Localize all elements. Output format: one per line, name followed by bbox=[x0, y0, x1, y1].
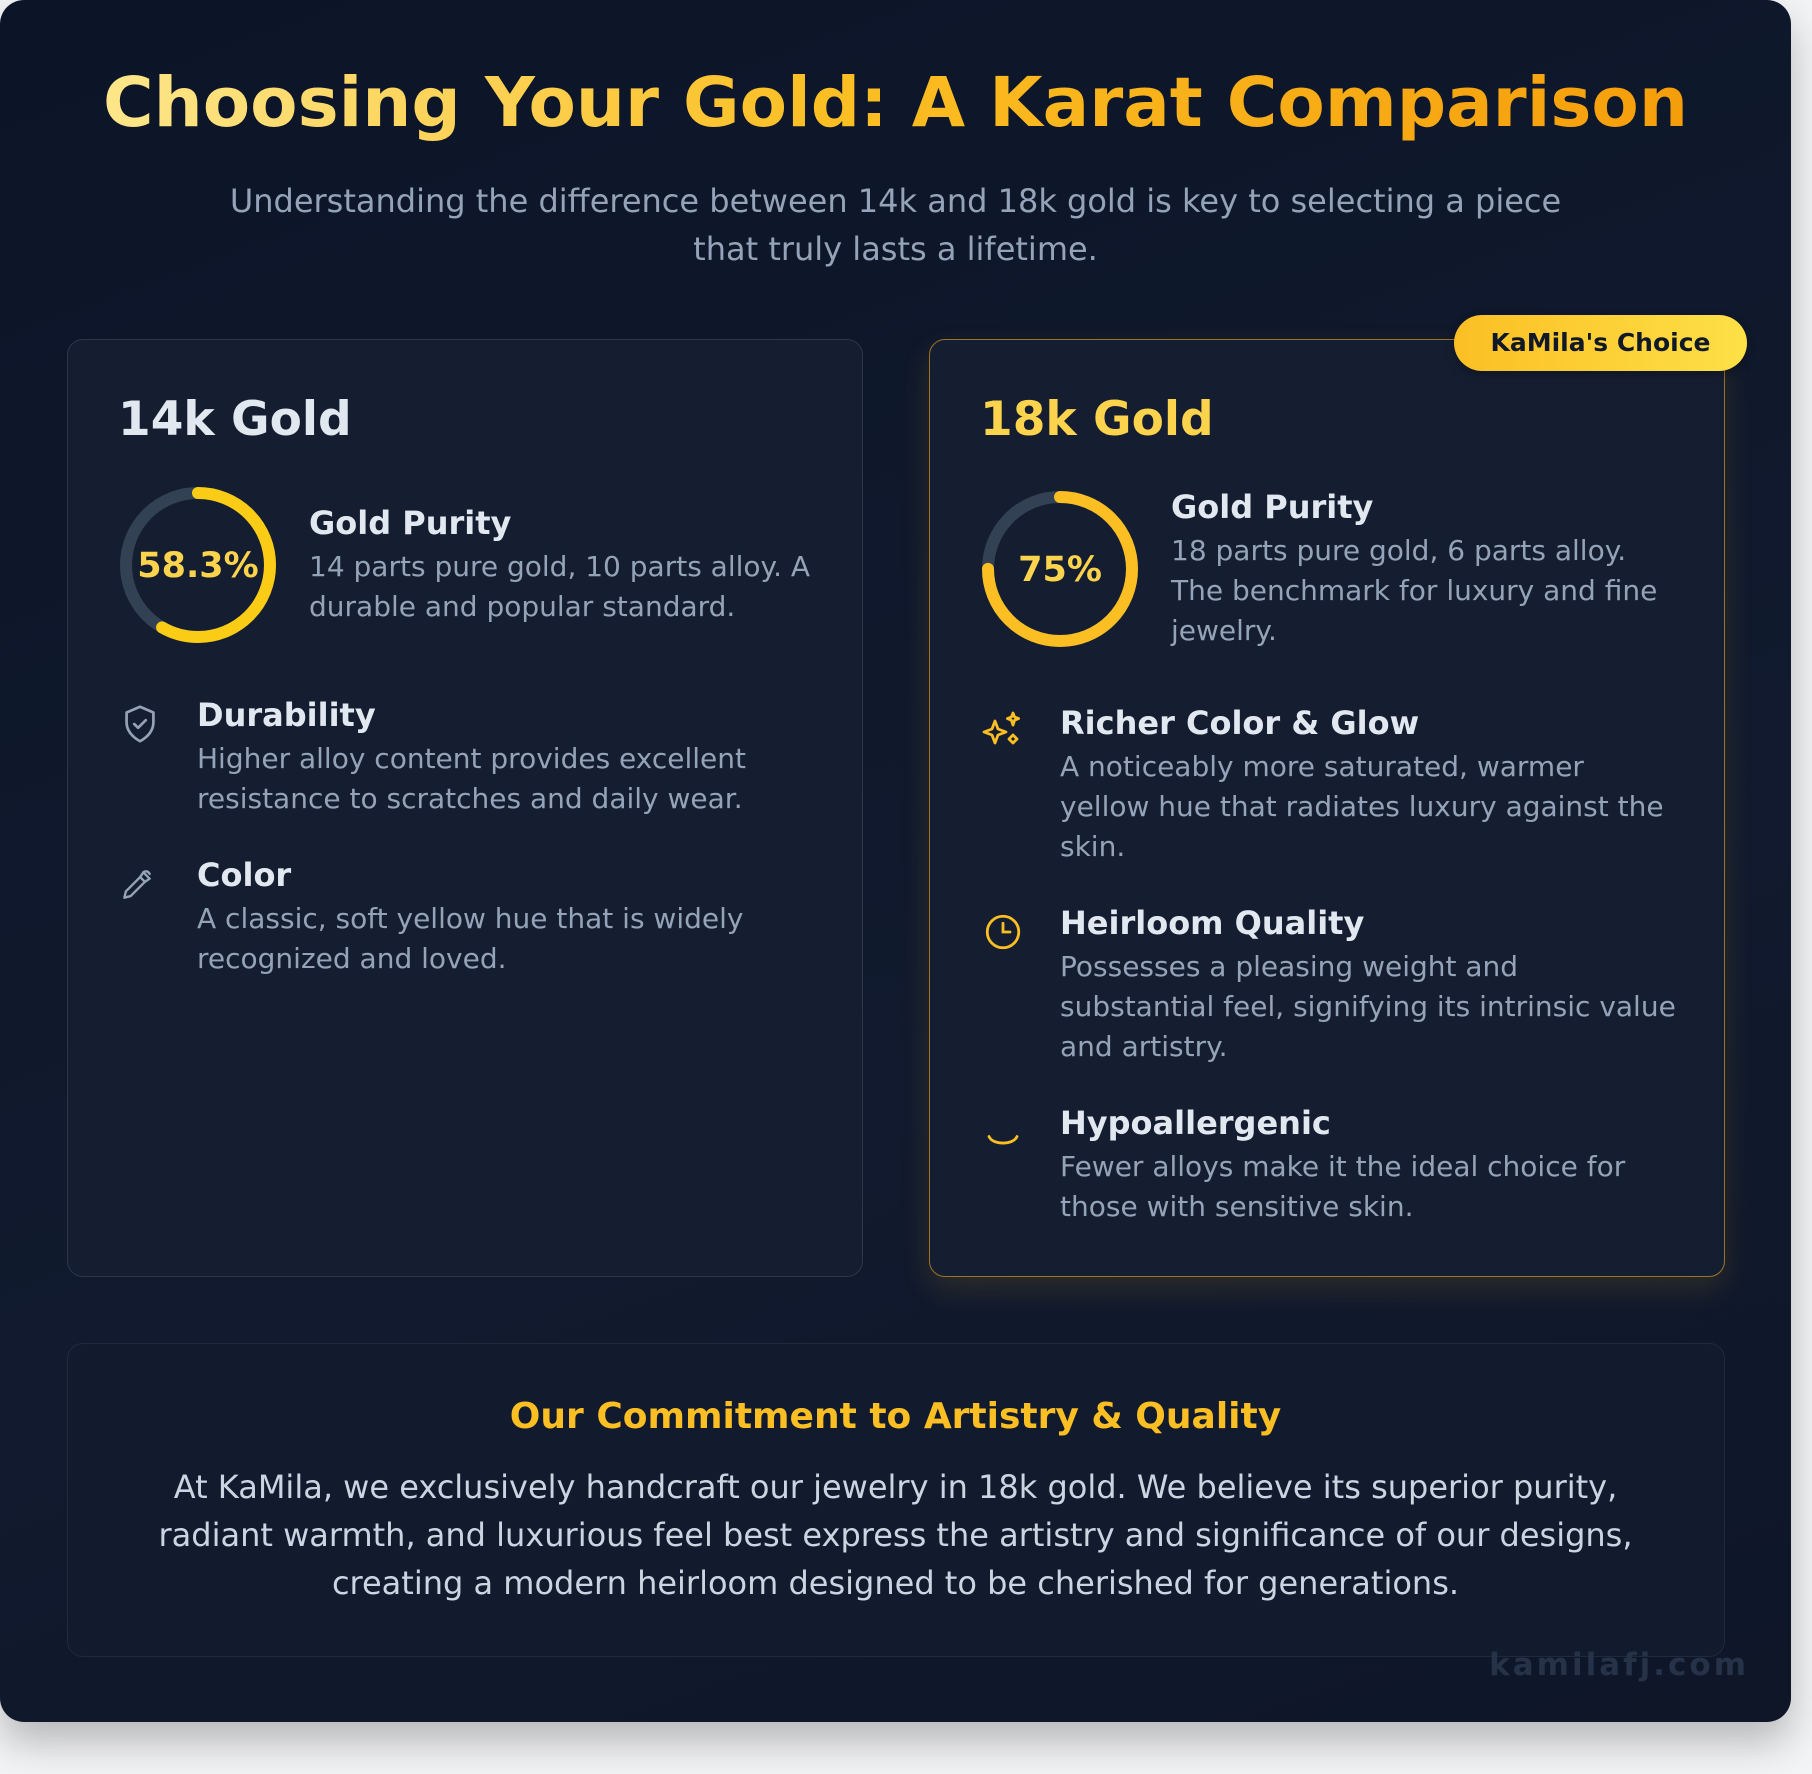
badge: KaMila's Choice bbox=[1454, 315, 1747, 371]
icon: sparkles bbox=[982, 712, 1020, 744]
text: commitment body: At KaMila, we exclusively handcraft our jewelry in 18k gold. We believe its superior purity, bbox=[174, 1468, 1617, 1506]
text: richer color: yellow hue that radiates luxury against the bbox=[1060, 790, 1664, 823]
text: commitment body: creating a modern heirloom designed to be cherished for generations. bbox=[332, 1564, 1459, 1602]
text: gold purity: Gold Purity bbox=[1171, 488, 1373, 526]
text: durability: Higher alloy content provides excellent bbox=[197, 742, 746, 775]
text: commitment body bbox=[158, 1468, 1633, 1602]
text: heirloom quality: and artistry. bbox=[1060, 1030, 1228, 1063]
icon: clock bbox=[986, 914, 1020, 950]
heading: 18k Gold: 18k Gold bbox=[980, 392, 1214, 447]
text: richer color: A noticeably more saturated, warmer bbox=[1060, 750, 1584, 783]
text: heirloom quality bbox=[1060, 904, 1676, 1063]
badge: KaMila's Choice: KaMila's Choice bbox=[1490, 328, 1711, 357]
subtitle: that truly lasts a lifetime. bbox=[693, 230, 1098, 268]
text: commitment body: radiant warmth, and luxurious feel best express the artistry and significance of our designs, bbox=[158, 1516, 1633, 1554]
panel: 18k gold bbox=[929, 339, 1725, 1277]
text: richer color bbox=[1060, 704, 1664, 863]
donut chart 58.3% bbox=[120, 487, 276, 643]
text: heirloom quality: Heirloom Quality bbox=[1060, 904, 1364, 942]
text: durability bbox=[197, 696, 746, 815]
donut chart 75%: 75% bbox=[1018, 550, 1102, 590]
watermark: kamilafj.com bbox=[1489, 1647, 1749, 1683]
icon: smile bbox=[988, 1135, 1018, 1144]
text: color bbox=[197, 856, 743, 975]
subtitle: Understanding the difference between 14k and 18k gold is key to selecting a piece bbox=[230, 182, 1561, 220]
text: hypoallergenic: Fewer alloys make it the ideal choice for bbox=[1060, 1150, 1625, 1183]
text: gold purity bbox=[309, 504, 810, 623]
text: durability: resistance to scratches and daily wear. bbox=[197, 782, 743, 815]
donut chart 75% bbox=[982, 491, 1138, 647]
text: durability: Durability bbox=[197, 696, 376, 734]
text: gold purity: jewelry. bbox=[1171, 614, 1277, 647]
text: color: Color bbox=[197, 856, 291, 894]
text: color: A classic, soft yellow hue that is widely bbox=[197, 902, 743, 935]
donut chart 58.3%: 58.3% bbox=[137, 546, 259, 586]
text: heirloom quality: Possesses a pleasing weight and bbox=[1060, 950, 1518, 983]
text: gold purity: Gold Purity bbox=[309, 504, 511, 542]
text: color: recognized and loved. bbox=[197, 942, 507, 975]
icon: shield bbox=[125, 705, 155, 743]
text: gold purity: 14 parts pure gold, 10 parts alloy. A bbox=[309, 550, 810, 583]
text: hypoallergenic: Hypoallergenic bbox=[1060, 1104, 1331, 1142]
title: Choosing Your Gold: A Karat Comparison bbox=[103, 63, 1688, 143]
text: hypoallergenic bbox=[1060, 1104, 1626, 1223]
text: heirloom quality: substantial feel, signifying its intrinsic value bbox=[1060, 990, 1676, 1023]
text: richer color: skin. bbox=[1060, 830, 1125, 863]
subtitle bbox=[230, 182, 1561, 268]
panel: 14k gold bbox=[67, 339, 863, 1277]
text: gold purity: durable and popular standard. bbox=[309, 590, 735, 623]
text: richer color: Richer Color & Glow bbox=[1060, 704, 1419, 742]
heading: 14k Gold: 14k Gold bbox=[118, 392, 352, 447]
text: gold purity: The benchmark for luxury and fine bbox=[1171, 574, 1657, 607]
text: gold purity: 18 parts pure gold, 6 parts alloy. bbox=[1171, 534, 1626, 567]
panel: commitment bbox=[67, 1343, 1725, 1657]
icon: brush bbox=[123, 870, 151, 899]
text: gold purity bbox=[1170, 488, 1657, 647]
text: hypoallergenic: those with sensitive skin. bbox=[1060, 1190, 1414, 1223]
heading: commitment: Our Commitment to Artistry & Quality bbox=[510, 1396, 1281, 1437]
